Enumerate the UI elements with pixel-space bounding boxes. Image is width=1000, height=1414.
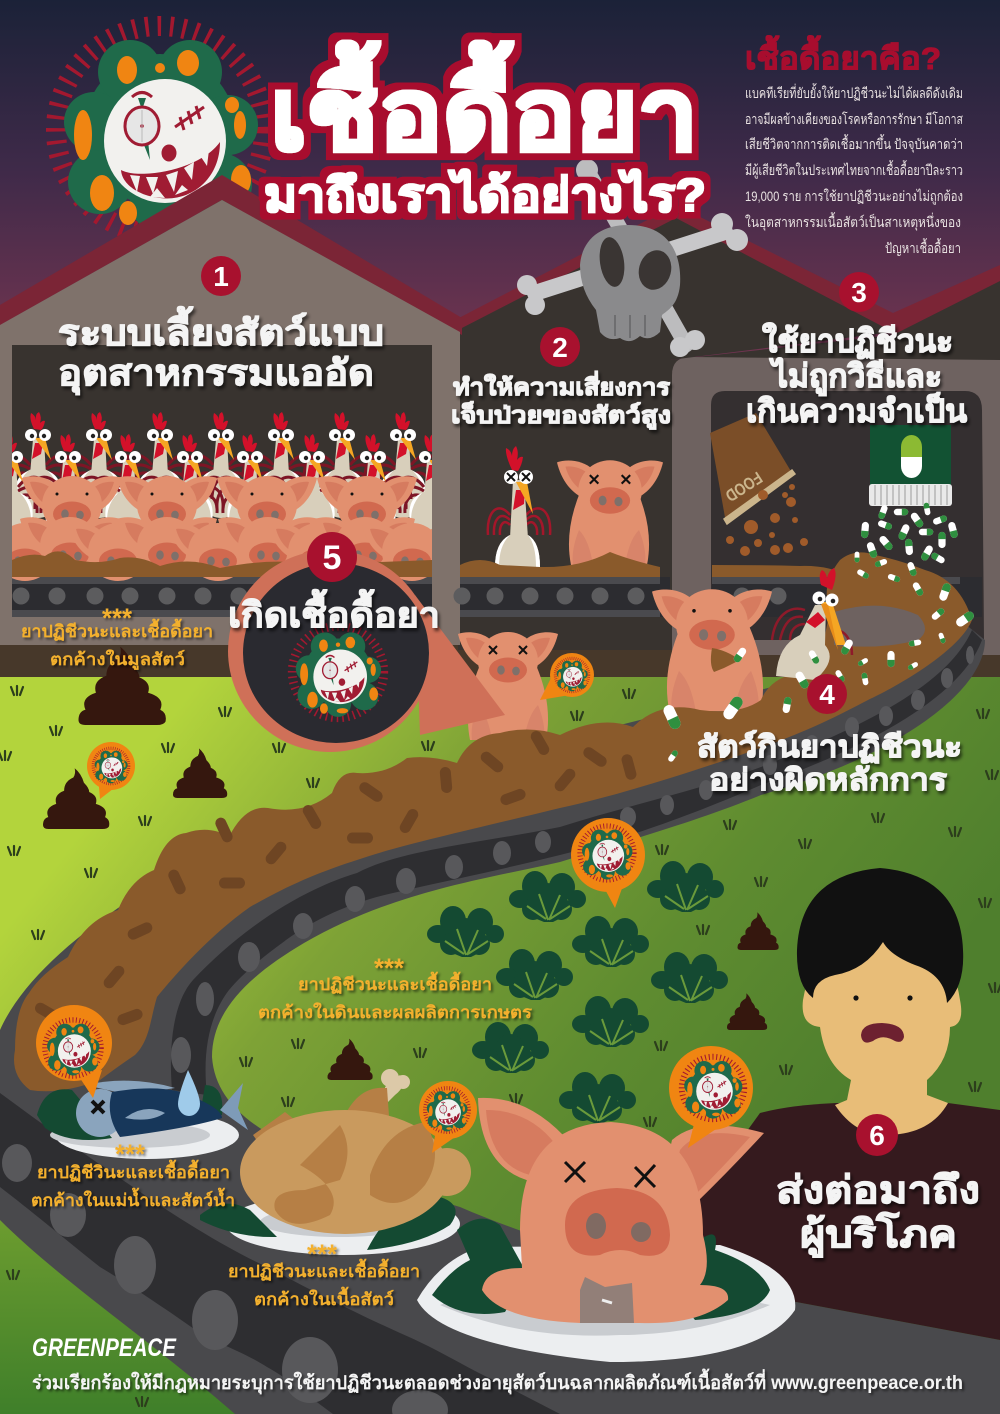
note: residue in rivers and aquatic animals: ยาปฏิชีวินะและเชื้อดื้อยา — [37, 1159, 230, 1182]
main title: มาถึงเราได้อย่างไร? — [264, 169, 706, 221]
step 4 heading: สัตว์กินยาปฏิชีวนะ — [697, 730, 962, 764]
note: residue in manure: ยาปฏิชีวนะและเชื้อดื้อยา — [21, 618, 213, 641]
number badge 6 — [856, 1114, 898, 1156]
note: residue in manure: *** — [102, 603, 132, 633]
note: residue in meat — [228, 1239, 420, 1309]
gap in belt curve — [834, 606, 925, 647]
fish on plate — [37, 1070, 248, 1159]
barn 2 building: middle — [455, 205, 893, 650]
roast chicken on plate — [200, 1069, 471, 1255]
pig eating antibiotic food — [652, 589, 772, 711]
step 3 heading — [746, 322, 967, 429]
footer call to action: ร่วมเรียกร้องให้มีกฎหมายระบุการใช้ยาปฏิชีวนะตลอดช่วงอายุสัตว์บนฉลากผลิตภัณฑ์เนื้อสัตว์ที่ www.greenpeace.or.th — [32, 1368, 963, 1395]
Greenpeace logo: GREENPEACE — [32, 1334, 177, 1362]
number badge 5 — [307, 532, 357, 582]
food pile on barn 1 conveyor — [12, 551, 432, 577]
step 4 heading: อย่างผิดหลักการ — [709, 764, 947, 797]
explainer text block: ในอุตสาหกรรมเนื้อสัตว์เป็นสาเหตุหนึ่งของ — [745, 212, 961, 231]
number badge 3 — [839, 272, 879, 312]
sick chicken in barn 2 — [488, 446, 550, 567]
step 6 heading: ผู้บริโภค — [800, 1211, 957, 1258]
main title: เชื้อดื้อยา — [270, 41, 698, 171]
note: residue in meat: ยาปฏิชีวนะและเชื้อดื้อยา — [228, 1258, 420, 1281]
step 3 heading: ใช้ยาปฏิชีวนะ — [762, 322, 953, 359]
number badge 4: 4 — [819, 679, 835, 710]
note: residue in meat: ตกค้างในเนื้อสัตว์ — [254, 1286, 394, 1309]
poop piles on grass — [43, 647, 779, 1080]
note: residue in rivers and aquatic animals — [31, 1139, 235, 1210]
bottom-left grass patch — [0, 1210, 260, 1414]
number badge 2: 2 — [552, 332, 568, 363]
orange virus bubbles — [36, 653, 753, 1153]
note: residue in soil and crops: ยาปฏิชีวนะและเชื้อดื้อยา — [298, 971, 492, 994]
food sack with pellets falling — [710, 413, 808, 556]
explainer text block: ปัญหาเชื้อดื้อยา — [885, 238, 961, 256]
dark belt ribbon with rollers, lower section — [0, 1093, 560, 1414]
number badge 3: 3 — [851, 277, 867, 308]
pellets in food pile — [33, 729, 638, 1027]
number badge 6: 6 — [869, 1120, 885, 1151]
pig with bubble beside speech pointer — [458, 632, 558, 740]
step 2 heading: ทำให้ความเสี่ยงการ — [453, 370, 671, 400]
food sack with pellets falling: FOOD — [722, 468, 766, 505]
number badge 1 — [201, 256, 241, 296]
step 1 heading: อุตสาหกรรมแออัด — [58, 352, 374, 396]
step 1 heading — [58, 306, 384, 396]
explainer text block — [745, 35, 963, 256]
food pile on barn 2 and 3 conveyor — [460, 552, 850, 577]
step 3 heading: ไม่ถูกวิธีและ — [769, 357, 942, 397]
step 2 heading — [451, 370, 671, 430]
crowded chickens row — [12, 412, 432, 530]
note: residue in manure: ตกค้างในมูลสัตว์ — [50, 649, 185, 671]
step 2 heading: เจ็บป่วยของสัตว์สูง — [451, 400, 671, 430]
step 1 heading: ระบบเลี้ยงสัตว์แบบ — [58, 306, 384, 353]
crowded pigs rows — [0, 476, 462, 581]
falling and scattered antibiotic pills — [662, 502, 976, 763]
number badge 1: 1 — [213, 261, 229, 292]
note: residue in meat: *** — [307, 1239, 337, 1269]
dark belt ribbon with rollers, upper section — [171, 630, 982, 1095]
pig on plate — [417, 1098, 795, 1362]
consumer person — [690, 868, 1000, 1340]
sky background — [0, 0, 1000, 680]
chicken eating pills — [772, 568, 852, 680]
speech bubble: step 5 virus appears — [228, 550, 505, 752]
number badge 5: 5 — [323, 539, 341, 577]
antibiotic powder bag with pill icon — [869, 425, 952, 506]
step 4 heading — [697, 730, 962, 797]
barn 3 building: right — [670, 265, 1000, 655]
brown food pile on conveyor — [14, 552, 972, 1091]
grass tufts — [0, 686, 1000, 1406]
conveyor belts inside barns — [12, 577, 982, 617]
skull and crossbones icon — [517, 159, 748, 357]
step 6 heading: ส่งต่อมาถึง — [776, 1170, 980, 1212]
note: residue in soil and crops — [258, 953, 533, 1022]
number badge 2 — [540, 327, 580, 367]
number badge 4 — [807, 674, 847, 714]
sick pig in barn 2 — [557, 460, 663, 565]
large virus mascot icon — [56, 26, 264, 234]
note: residue in rivers and aquatic animals: *** — [115, 1139, 145, 1169]
plants on field — [427, 861, 728, 1123]
step 3 heading: เกินความจำเป็น — [746, 391, 967, 429]
ground: brown band and green field — [0, 640, 1000, 1414]
note: residue in soil and crops: ตกค้างในดินและผลผลิตการเกษตร — [258, 1002, 533, 1022]
explainer text block: เชื้อดื้อยาคือ? — [745, 35, 941, 76]
main title — [264, 41, 706, 221]
note: residue in manure — [21, 603, 213, 671]
step 5 heading: เกิดเชื้อดื้อยา — [228, 589, 440, 635]
step 6 heading — [776, 1170, 980, 1258]
serpentine conveyor belt surface — [0, 620, 1000, 1414]
note: residue in rivers and aquatic animals: ตกค้างในแม่น้ำและสัตว์น้ำ — [31, 1187, 235, 1210]
barn 1 building: left — [0, 175, 462, 645]
note: residue in soil and crops: *** — [374, 953, 404, 983]
